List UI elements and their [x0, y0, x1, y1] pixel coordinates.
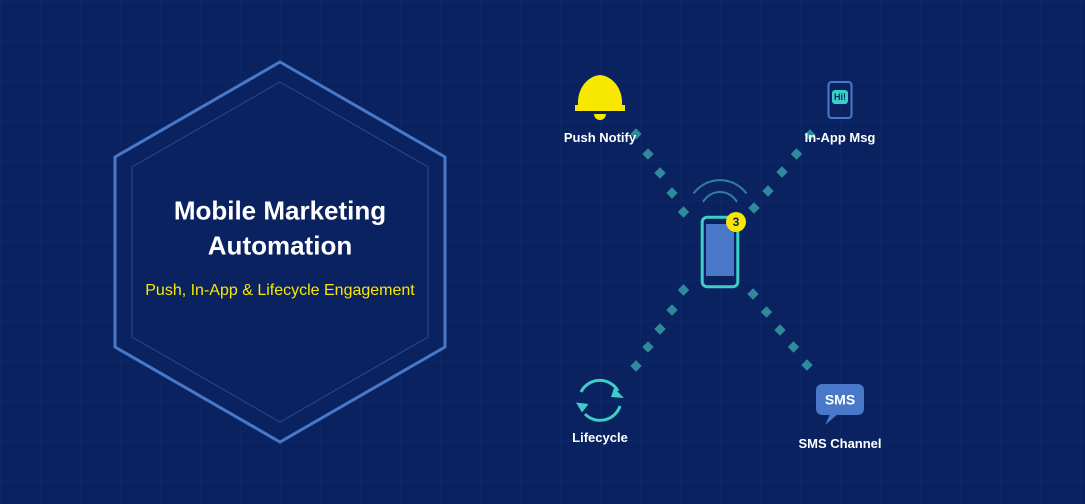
icon: in-app screen: Hi!	[834, 92, 846, 102]
title: Mobile Marketing	[174, 196, 386, 226]
label: Lifecycle	[572, 430, 628, 445]
node: lifecycle	[572, 380, 628, 445]
connector: phone to lifecycle	[630, 284, 689, 372]
title: Automation	[208, 230, 352, 260]
connector: phone to SMS channel	[747, 288, 813, 371]
node: in-app message	[805, 82, 875, 145]
subtitle: Push, In-App & Lifecycle Engagement	[145, 282, 415, 299]
connector: phone to in-app message	[748, 129, 816, 214]
label: In-App Msg	[805, 130, 875, 145]
icon: SMS bubble: SMS	[825, 392, 855, 408]
badge: notification count: 3	[733, 215, 740, 229]
node: push notify	[564, 75, 637, 145]
connector: phone to push notify	[630, 128, 689, 218]
icon: central phone	[702, 212, 746, 287]
icon: bell	[575, 75, 625, 120]
panel: title hexagon	[115, 62, 445, 442]
node: SMS channel	[798, 384, 882, 451]
icon: signal arcs	[694, 180, 746, 202]
icon: cycle arrows	[576, 380, 624, 420]
label: Push Notify	[564, 130, 637, 145]
label: SMS Channel	[798, 436, 882, 451]
